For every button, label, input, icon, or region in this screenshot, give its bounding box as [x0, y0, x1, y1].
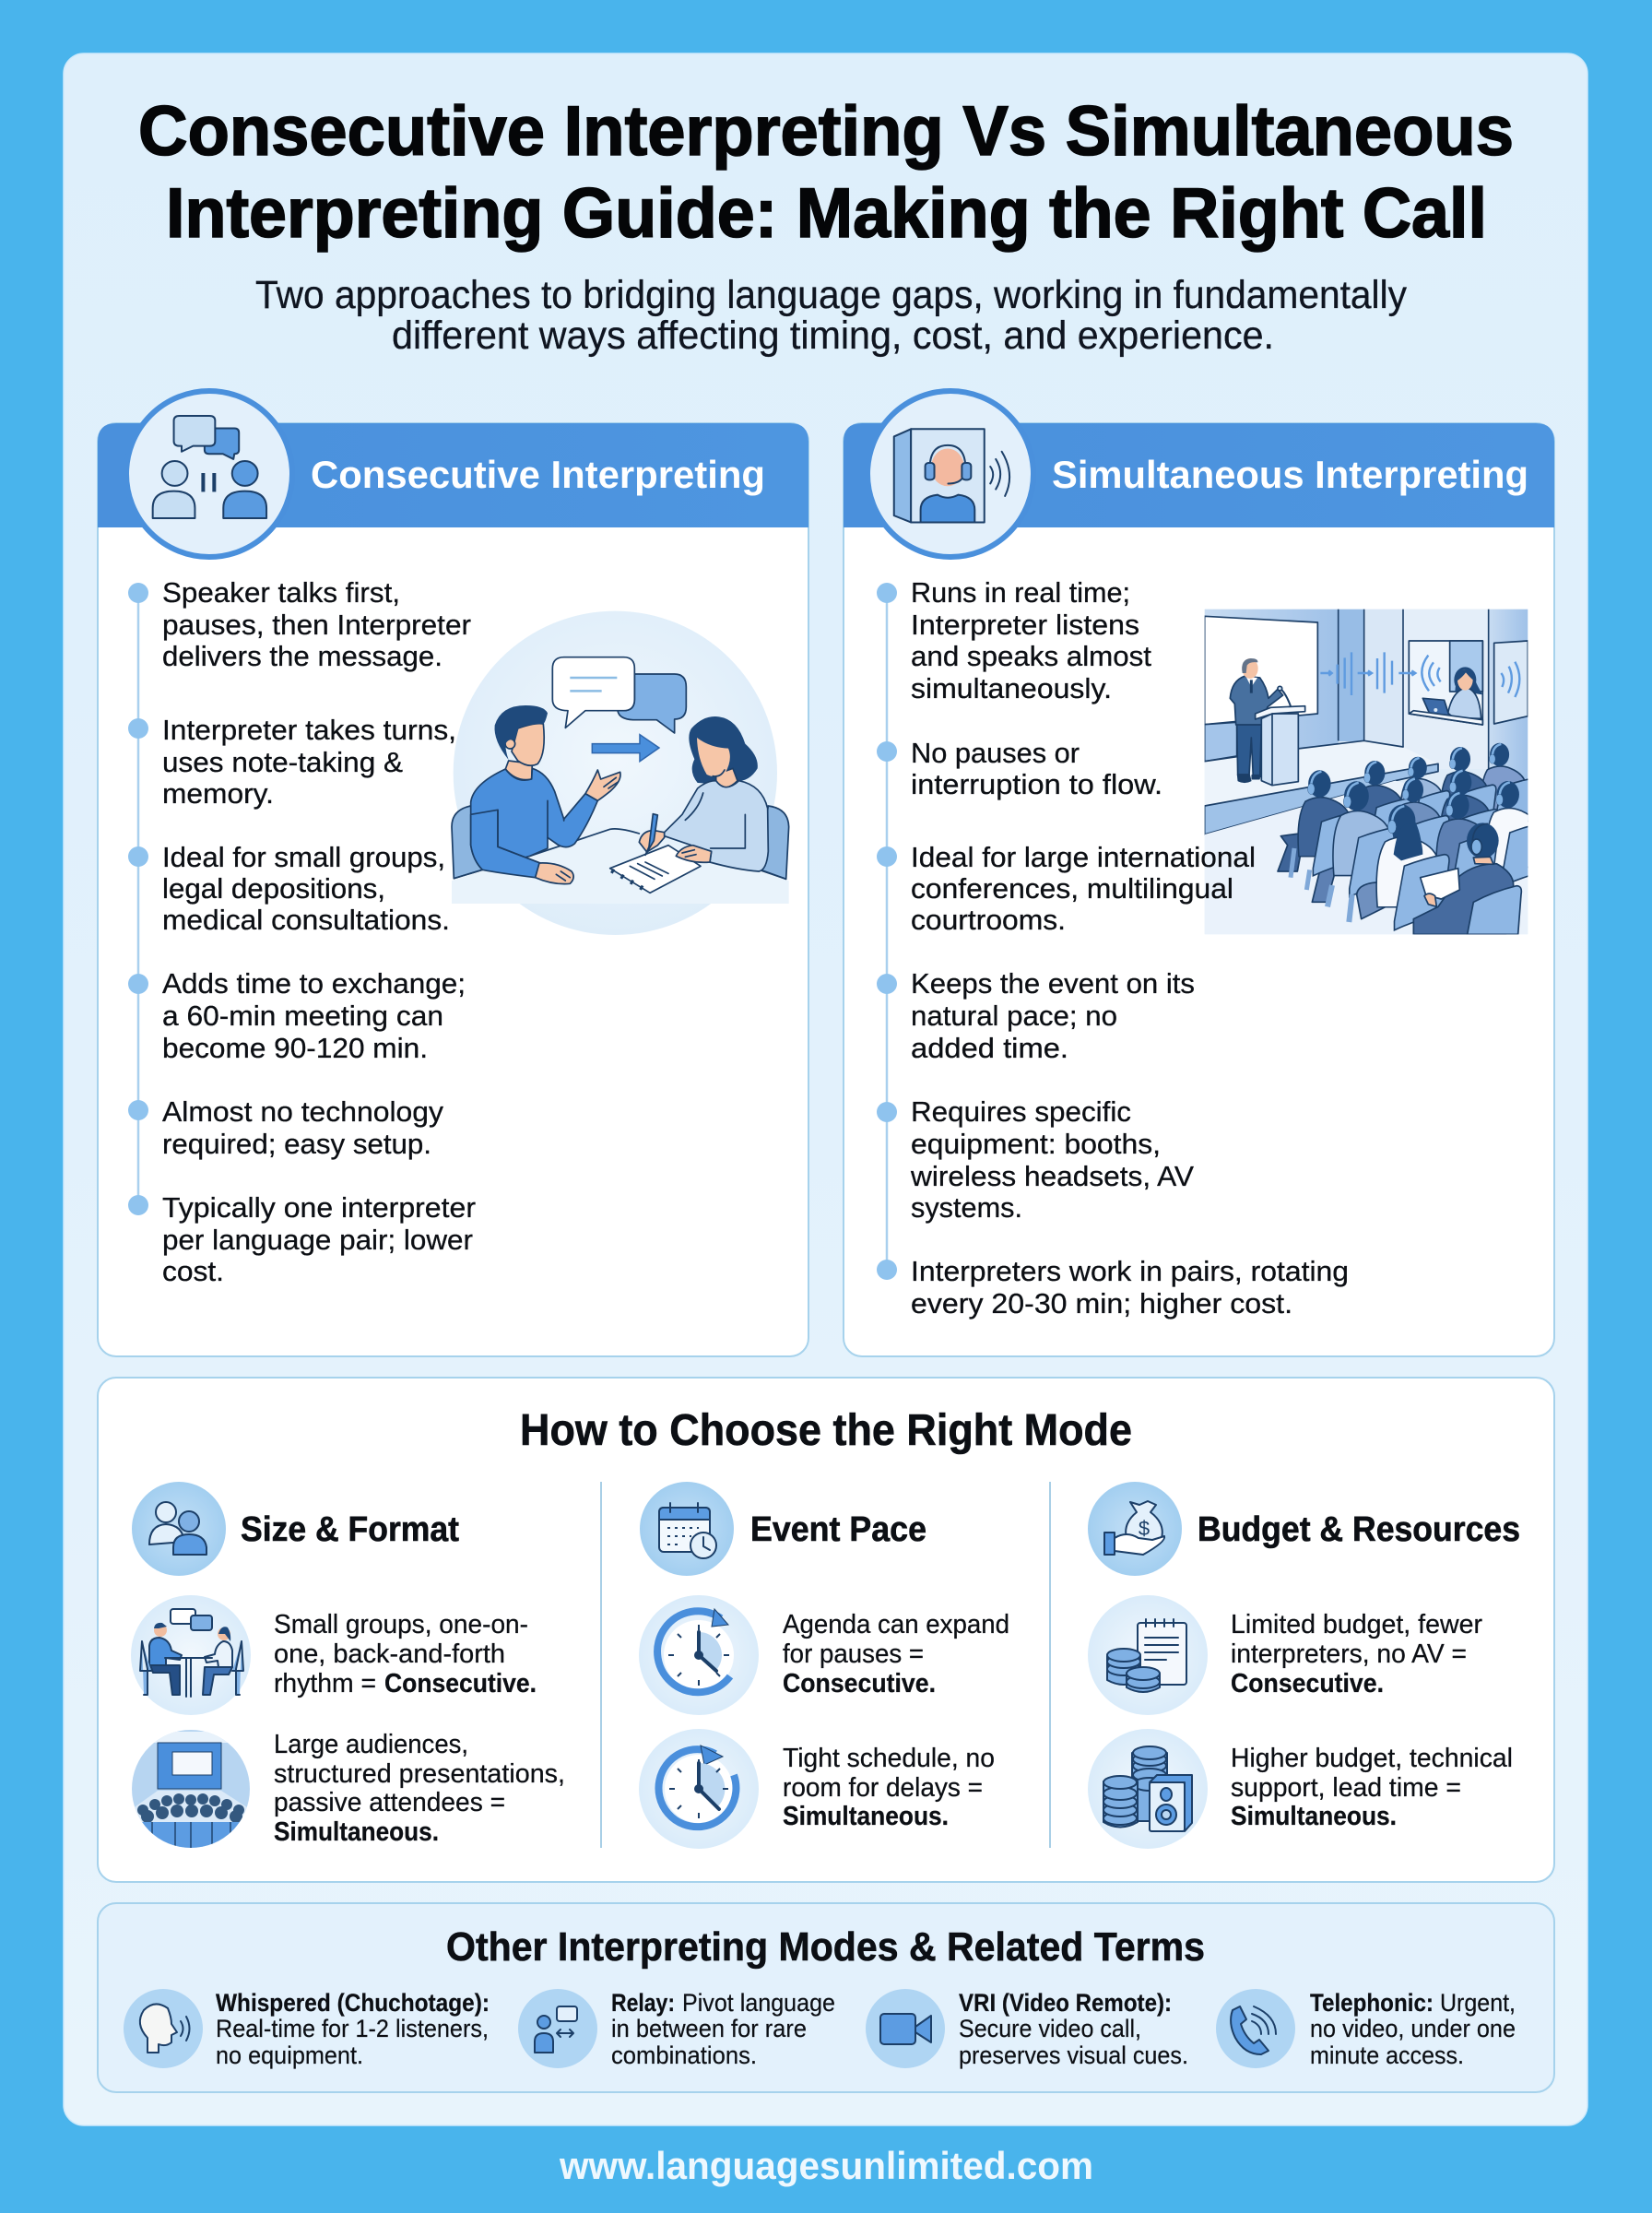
bullet 2: interruption to flow. — [911, 768, 1162, 800]
item: relay — [518, 1989, 835, 2069]
bullet 1 — [877, 576, 1151, 704]
panel: simultaneous interpreting — [844, 391, 1554, 1356]
icon: clock with expanding arrow — [639, 1595, 759, 1715]
icon: money bag in hand — [1088, 1482, 1182, 1576]
text: limited budget: Limited budget, fewer — [1231, 1610, 1482, 1639]
text: tight schedule: Simultaneous. — [783, 1802, 949, 1831]
bullet 4: a 60-min meeting can — [162, 1000, 443, 1032]
panel body — [98, 1903, 1554, 2092]
bullet 1: delivers the message. — [162, 640, 442, 672]
bullet 3: courtrooms. — [911, 904, 1066, 936]
title: Interpreting Guide: Making the Right Call — [166, 174, 1487, 253]
timeline line — [886, 593, 888, 1270]
icon: two people — [132, 1482, 226, 1576]
icon: large auditorium — [132, 1730, 250, 1850]
bullet 1 — [128, 576, 471, 672]
text: agenda can expand: Agenda can expand — [783, 1610, 1009, 1639]
icon: interpreter in booth — [867, 391, 1033, 557]
text: small groups: Consecutive. — [384, 1669, 537, 1698]
text: small groups: one, back-and-forth — [274, 1639, 505, 1669]
text: tight schedule — [783, 1744, 995, 1831]
bullet 2: memory. — [162, 777, 274, 810]
bullet 5: Almost no technology — [162, 1095, 443, 1128]
column: size and format — [131, 1482, 565, 1850]
bullet 5 — [877, 1095, 1194, 1224]
bullet 6: Interpreters work in pairs, rotating — [911, 1255, 1349, 1287]
text: higher budget: support, lead time = — [1231, 1773, 1461, 1803]
bullet 5 — [128, 1095, 443, 1160]
text: agenda can expand: Consecutive. — [783, 1669, 936, 1698]
item: video remote: preserves visual cues. — [959, 2041, 1188, 2069]
bullet 4: Adds time to exchange; — [162, 967, 466, 1000]
bullet 1: and speaks almost — [911, 640, 1151, 672]
icon: telephone — [1216, 1989, 1295, 2068]
bullet 4 — [877, 967, 1195, 1064]
text: large audiences: Large audiences, — [274, 1730, 468, 1759]
panel header band — [98, 423, 808, 527]
text: limited budget: Consecutive. — [1231, 1669, 1384, 1698]
text: tight schedule: Tight schedule, no — [783, 1744, 995, 1773]
icon: relay people — [518, 1989, 597, 2068]
bullet 6: cost. — [162, 1255, 224, 1287]
item: relay: Pivot language — [682, 1989, 835, 2017]
text: higher budget: Simultaneous. — [1231, 1802, 1397, 1831]
column: event pace — [639, 1482, 1009, 1849]
item: video remote: VRI (Video Remote): — [959, 1989, 1172, 2017]
text: large audiences — [274, 1730, 565, 1847]
panel header band — [844, 423, 1554, 527]
item: video remote: Secure video call, — [959, 2015, 1141, 2042]
subtitle — [255, 273, 1407, 358]
bullet 4: Keeps the event on its — [911, 967, 1195, 1000]
icon: clock with tight schedule — [639, 1729, 759, 1849]
icon: notebook and coins — [1088, 1595, 1208, 1715]
item: telephonic: minute access. — [1310, 2041, 1464, 2069]
bullet 3: medical consultations. — [162, 904, 450, 936]
panel heading: Consecutive Interpreting — [311, 453, 765, 496]
icon: video camera — [866, 1989, 945, 2068]
bullet 5: Requires specific — [911, 1095, 1131, 1128]
bullet 6 — [128, 1191, 476, 1287]
item: relay: combinations. — [611, 2041, 757, 2069]
section heading: Other Interpreting Modes & Related Terms — [446, 1924, 1205, 1970]
bullet 1: Runs in real time; — [911, 576, 1130, 609]
text: small groups: rhythm = — [274, 1669, 376, 1698]
item: relay: in between for rare — [611, 2015, 807, 2042]
bullet 3: legal depositions, — [162, 872, 385, 905]
panel: consecutive interpreting — [98, 391, 808, 1356]
text: agenda can expand — [783, 1610, 1009, 1698]
item: telephonic: no video, under one — [1310, 2015, 1516, 2042]
text: higher budget: Higher budget, technical — [1231, 1744, 1513, 1773]
item: whispered: Real-time for 1-2 listeners, — [216, 2015, 489, 2042]
item: telephonic — [1216, 1989, 1516, 2069]
section heading: How to Choose the Right Mode — [520, 1406, 1132, 1455]
bullet 1: pauses, then Interpreter — [162, 609, 471, 641]
footer url: www.languagesunlimited.com — [559, 2144, 1093, 2187]
bullet 3: Ideal for large international — [911, 841, 1256, 873]
bullet 2: No pauses or — [911, 737, 1080, 769]
text: small groups: Small groups, one-on- — [274, 1610, 528, 1639]
bullet 3: Ideal for small groups, — [162, 841, 445, 873]
text: agenda can expand: for pauses = — [783, 1639, 924, 1669]
illustration: conference hall with interpreter booth — [1205, 609, 1548, 934]
item: telephonic: Urgent, — [1440, 1989, 1516, 2017]
icon: money bag in hand: $ — [1139, 1517, 1150, 1540]
text: large audiences: structured presentations, — [274, 1759, 565, 1789]
bullet 5: systems. — [911, 1191, 1022, 1224]
panel: how to choose — [98, 1378, 1554, 1882]
bullet 1: Speaker talks first, — [162, 576, 400, 609]
item: video remote — [866, 1989, 1188, 2069]
text: large audiences: Simultaneous. — [274, 1817, 439, 1847]
bullet 4 — [128, 967, 466, 1064]
bullet 2 — [877, 737, 1162, 800]
icon: coins and speaker — [1088, 1729, 1208, 1849]
icon: meeting at a table — [131, 1595, 251, 1715]
item: whispered — [124, 1989, 490, 2069]
text: small groups — [274, 1610, 537, 1698]
illustration: interpreter taking notes with speaker — [452, 611, 789, 935]
text: tight schedule: room for delays = — [783, 1773, 983, 1803]
bullet 3: conferences, multilingual — [911, 872, 1233, 905]
bullet 4: become 90-120 min. — [162, 1032, 428, 1064]
bullet 3 — [128, 841, 450, 936]
bullet 5: wireless headsets, AV — [910, 1160, 1194, 1192]
column: budget and resources — [1088, 1482, 1520, 1849]
panel body — [844, 423, 1554, 1356]
text: higher budget — [1231, 1744, 1513, 1831]
icon: calendar and clock — [640, 1482, 734, 1576]
text: limited budget — [1231, 1610, 1482, 1698]
subtitle: Two approaches to bridging language gaps, working in fundamentally — [255, 273, 1407, 317]
bullet 5: equipment: booths, — [911, 1128, 1161, 1160]
heading: Event Pace — [750, 1510, 926, 1549]
timeline line — [137, 593, 139, 1205]
subtitle: different ways affecting timing, cost, and experience. — [392, 314, 1274, 358]
heading: Size & Format — [241, 1510, 459, 1549]
bullet 6: per language pair; lower — [162, 1224, 473, 1256]
text: limited budget: interpreters, no AV = — [1231, 1639, 1467, 1669]
bullet 5: required; easy setup. — [162, 1128, 431, 1160]
panel body — [98, 423, 808, 1356]
bullet 1: simultaneously. — [911, 672, 1112, 704]
text: large audiences: passive attendees = — [274, 1788, 505, 1817]
icon: two speakers with pause — [126, 391, 292, 557]
bullet 6 — [877, 1255, 1349, 1320]
bullet 2: uses note-taking & — [162, 746, 403, 778]
bullet 2: Interpreter takes turns, — [162, 714, 456, 746]
bullet 4: natural pace; no — [911, 1000, 1117, 1032]
icon: head whispering — [124, 1989, 203, 2068]
title — [138, 92, 1514, 253]
item: whispered: Whispered (Chuchotage): — [216, 1989, 490, 2017]
heading: Budget & Resources — [1198, 1510, 1520, 1549]
item: telephonic: Telephonic: — [1310, 1989, 1434, 2017]
panel: other interpreting modes — [98, 1903, 1554, 2092]
panel heading: Simultaneous Interpreting — [1052, 453, 1528, 496]
bullet 2 — [128, 714, 456, 810]
bullet 4: added time. — [911, 1032, 1068, 1064]
bullet 3 — [877, 841, 1256, 936]
panel body — [98, 1378, 1554, 1882]
bullet 6: Typically one interpreter — [162, 1191, 476, 1224]
item: relay: Relay: — [611, 1989, 675, 2017]
item: whispered: no equipment. — [216, 2041, 363, 2069]
bullet 6: every 20-30 min; higher cost. — [911, 1287, 1292, 1320]
bullet 1: Interpreter listens — [911, 609, 1139, 641]
title: Consecutive Interpreting Vs Simultaneous — [138, 92, 1514, 171]
